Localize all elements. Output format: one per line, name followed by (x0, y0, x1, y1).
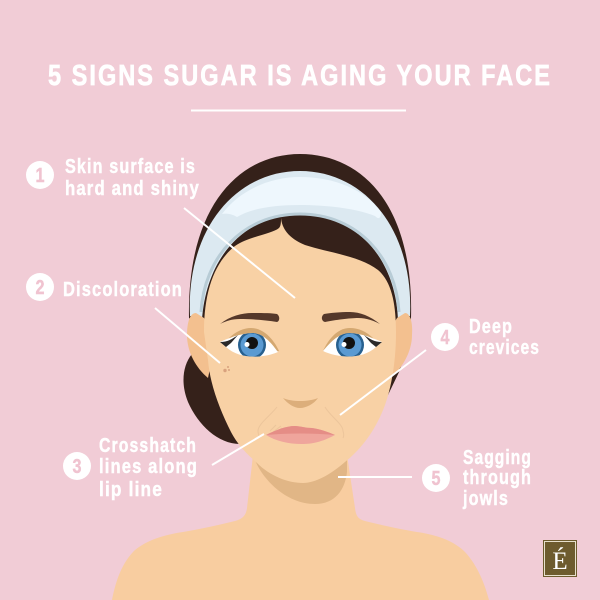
callout 5: 5 (432, 468, 440, 490)
shoulders and neck (112, 455, 489, 600)
callout 3: 3 (72, 456, 82, 478)
left eye (220, 328, 279, 359)
callout 5 (338, 446, 532, 510)
callout 1: 1 (36, 165, 44, 187)
illustration: woman's face (112, 154, 489, 600)
callout 1: Skin surface is (65, 155, 196, 178)
hair back (189, 154, 411, 395)
headband highlight (222, 177, 381, 218)
logo: É (552, 547, 568, 575)
right ear (384, 313, 412, 378)
left ear (187, 313, 216, 378)
callout 3 (63, 434, 264, 501)
right eye (323, 328, 382, 359)
logo (543, 540, 577, 577)
callout 5: jowls (462, 487, 509, 510)
headband shade (201, 214, 399, 312)
lips (266, 426, 335, 444)
callout 3: lines along (99, 455, 198, 478)
callout 3: lip line (99, 478, 163, 501)
callout 4: Deep (469, 315, 513, 338)
callout 5: Sagging (463, 446, 532, 469)
age spots (223, 366, 230, 372)
hair bun (183, 354, 240, 444)
wrinkles (258, 407, 344, 438)
nose (283, 398, 318, 408)
callout 4 (340, 315, 540, 415)
callout 1: hard and shiny (65, 177, 200, 200)
callout 2: Discoloration (63, 278, 183, 301)
callout 3: Crosshatch (99, 434, 197, 457)
callout 4: crevices (469, 336, 540, 359)
headband (190, 171, 410, 320)
callout 2 (26, 273, 220, 363)
callout 2: 2 (36, 277, 44, 299)
right eyebrow (322, 312, 380, 324)
face (204, 218, 396, 483)
callout 1 (26, 155, 295, 298)
callout 5: through (463, 466, 532, 489)
left eyebrow (220, 313, 279, 324)
callout 4: 4 (440, 327, 450, 349)
neck shadow (255, 455, 347, 504)
